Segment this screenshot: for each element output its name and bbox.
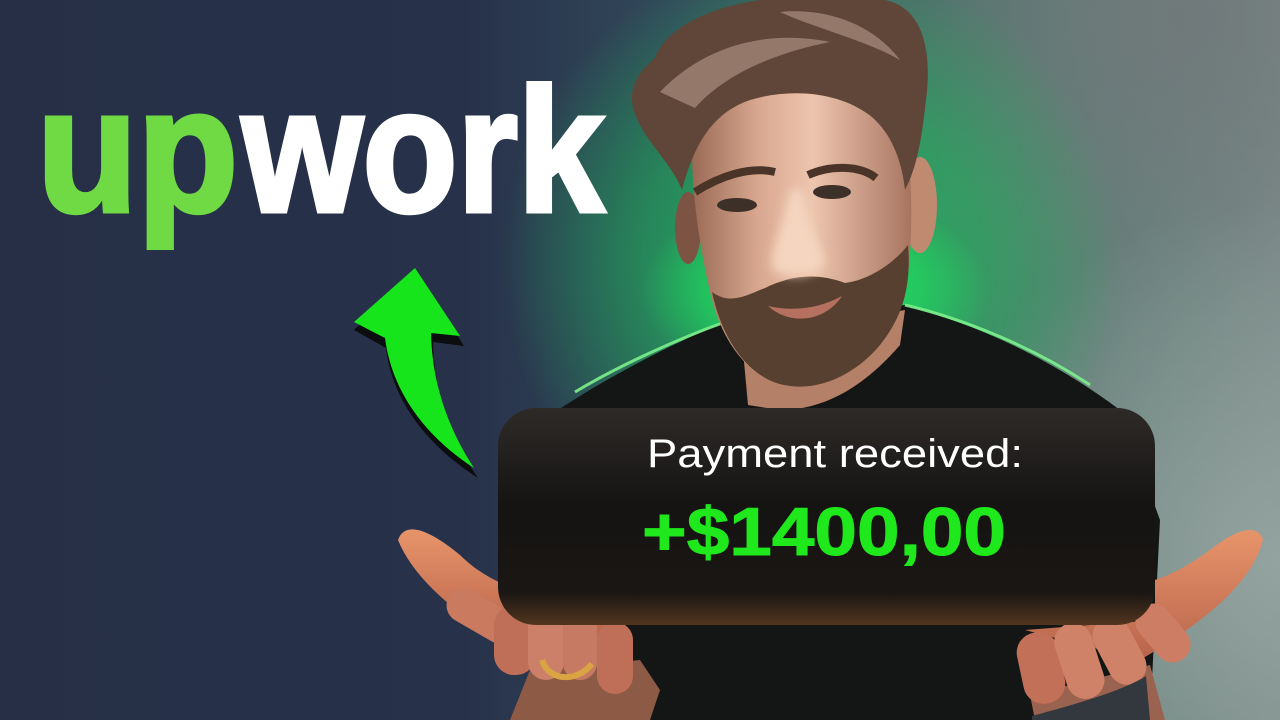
shirt rim light xyxy=(575,305,1090,392)
left ear xyxy=(675,192,701,264)
fingers xyxy=(440,582,633,694)
left hand xyxy=(398,529,660,720)
payment card xyxy=(498,408,1155,625)
payment amount: +$1400,00 xyxy=(642,494,1006,570)
forearm xyxy=(510,660,660,720)
right hand xyxy=(1013,530,1263,720)
right ear xyxy=(903,157,937,253)
hair highlight xyxy=(660,11,900,108)
right eye xyxy=(808,168,876,199)
beard xyxy=(712,245,909,387)
ring xyxy=(542,660,592,677)
green glow behind person xyxy=(500,0,1120,570)
person xyxy=(555,0,1160,720)
upwork logo xyxy=(37,53,605,249)
payment label: Payment received: xyxy=(647,432,1023,476)
face xyxy=(692,75,911,386)
logo: up: up xyxy=(37,53,238,249)
wrist xyxy=(1030,665,1165,720)
hair xyxy=(632,0,928,190)
left eye xyxy=(695,170,775,212)
nose xyxy=(772,190,825,276)
neck xyxy=(742,310,905,410)
logo: work: work xyxy=(241,53,605,249)
icon: green curved arrow xyxy=(354,268,478,478)
fingers xyxy=(1013,596,1198,708)
mouth xyxy=(768,296,842,319)
shirt xyxy=(555,305,1160,720)
wristwatch xyxy=(1032,676,1150,720)
